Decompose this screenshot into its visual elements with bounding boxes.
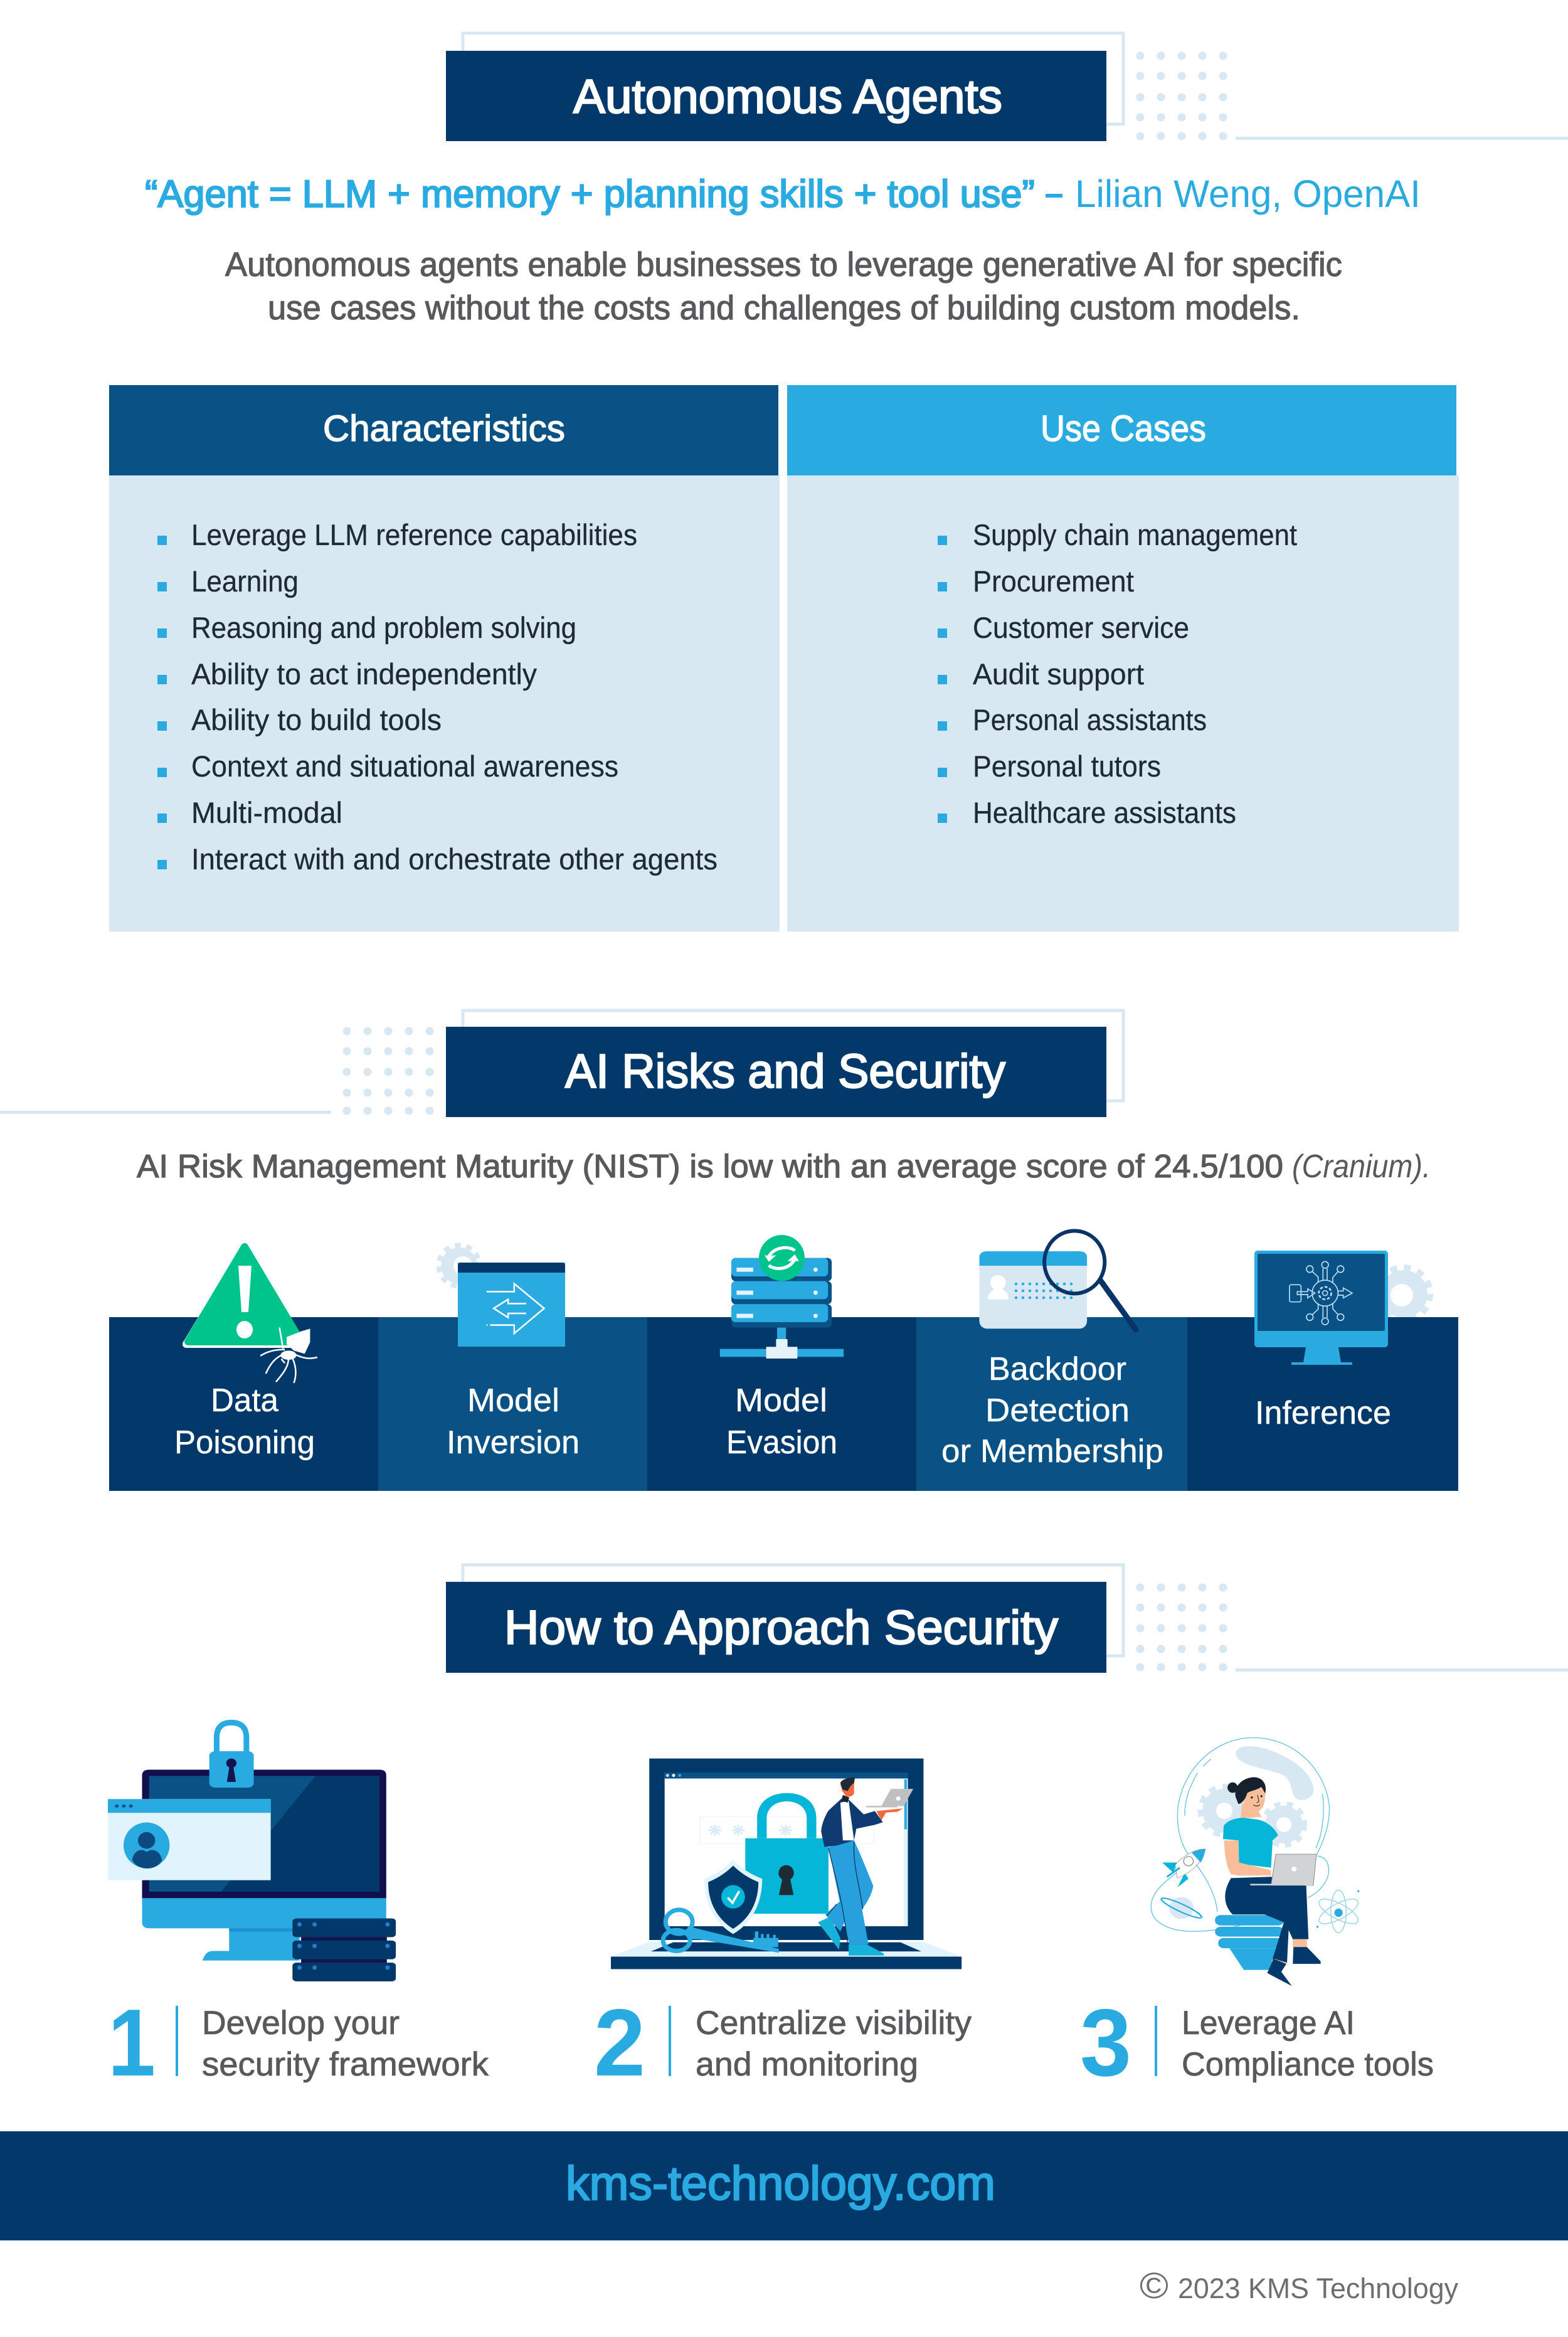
label: Evasion: [726, 1424, 837, 1461]
list: characteristics: Reasoning and problem solving: [191, 611, 576, 644]
label: [447, 1382, 580, 1461]
icon: arrows panel: [458, 1263, 565, 1347]
step 1 text: security framework: [202, 2046, 489, 2083]
risk: data poisoning: [174, 1247, 317, 1461]
step 1 text: [202, 2005, 489, 2083]
label: Detection: [985, 1392, 1130, 1429]
decorative gear: model inversion: [439, 1246, 479, 1286]
step 1: [108, 1722, 489, 2096]
risk: backdoor detection: [941, 1231, 1163, 1470]
list: characteristics: Ability to act independently: [191, 657, 537, 691]
title: How to Approach Security: [504, 1601, 1058, 1655]
label: Data: [211, 1382, 278, 1419]
heading: characteristics: Characteristics: [323, 408, 565, 449]
list: use cases: Healthcare assistants: [973, 796, 1236, 829]
list: characteristics: [157, 518, 718, 876]
risk band: [109, 1317, 1458, 1491]
title: Autonomous Agents: [573, 70, 1002, 124]
list: characteristics: Context and situational awareness: [191, 750, 618, 783]
label: [941, 1351, 1163, 1470]
icon: server with sync badge: [720, 1235, 844, 1359]
list: characteristics: Multi-modal: [191, 796, 342, 829]
list: characteristics: Leverage LLM reference capabilities: [191, 518, 637, 551]
label: [726, 1382, 837, 1461]
section header: AI Risks and Security: [0, 1010, 1123, 1117]
list: use cases: [938, 518, 1297, 829]
copyright: 2023 KMS Technology: [1178, 2272, 1458, 2304]
label: Inference: [1255, 1395, 1391, 1431]
quote line: Lilian Weng, OpenAI: [1075, 172, 1421, 215]
step 2: [594, 1759, 972, 2096]
illustration: laptop, padlock, shield, key, man: [611, 1759, 961, 1969]
list: use cases: Audit support: [973, 657, 1144, 691]
label: Inversion: [447, 1424, 580, 1461]
icon: warning triangle with spider: [186, 1247, 317, 1383]
panel: use cases: [787, 385, 1459, 931]
step 3 text: Compliance tools: [1182, 2046, 1434, 2083]
number 3: 3: [1080, 1990, 1131, 2096]
website link: kms-technology.com: [566, 2157, 995, 2210]
risk: model evasion: [720, 1235, 844, 1461]
intro paragraph: use cases without the costs and challenges of building custom models.: [268, 289, 1300, 327]
step 1 text: Develop your: [202, 2005, 400, 2042]
step 3: [1080, 1737, 1434, 2096]
decorative gear: inference: [1377, 1268, 1430, 1320]
risk: inference: [1254, 1251, 1391, 1431]
step 3 text: Leverage AI: [1182, 2005, 1355, 2042]
maturity statement: AI Risk Management Maturity (NIST) is low with an average score of 24.5/100: [137, 1148, 1283, 1185]
intro paragraph: Autonomous agents enable businesses to leverage generative AI for specific: [225, 246, 1342, 284]
copyright: [1140, 2265, 1458, 2306]
number 2: 2: [594, 1990, 645, 2096]
icon: magnifier over id card: [979, 1231, 1136, 1330]
illustration: woman on light bulb: [1151, 1737, 1362, 1986]
copyright: ©: [1140, 2265, 1168, 2306]
list: use cases: Customer service: [973, 611, 1189, 644]
footer band: [0, 2131, 1568, 2240]
risk: model inversion: [447, 1263, 580, 1461]
step 3 text: [1182, 2005, 1434, 2083]
icon: monitor with circuit: [1254, 1251, 1388, 1365]
step 2 text: Centralize visibility: [696, 2005, 972, 2042]
maturity statement: (Cranium).: [1292, 1148, 1431, 1185]
intro paragraph: [225, 246, 1342, 327]
quote line: “Agent = LLM + memory + planning skills + tool use”: [145, 172, 1035, 215]
label: Model: [735, 1382, 827, 1419]
label: Model: [467, 1382, 559, 1419]
list: characteristics: Learning: [191, 564, 299, 598]
section header: How to Approach Security: [446, 1565, 1568, 1673]
title: AI Risks and Security: [565, 1045, 1005, 1098]
step 2 text: and monitoring: [696, 2046, 918, 2083]
list: use cases: Supply chain management: [973, 518, 1297, 551]
label: Poisoning: [174, 1424, 315, 1461]
quote line: [145, 172, 1421, 215]
list: use cases: Procurement: [973, 564, 1134, 598]
step 2 text: [696, 2005, 972, 2083]
label: or Membership: [941, 1433, 1163, 1470]
illustration: monitor with lock and servers: [108, 1722, 396, 1981]
list: use cases: Personal tutors: [973, 750, 1161, 783]
section header: Autonomous Agents: [446, 33, 1568, 141]
list: use cases: Personal assistants: [973, 703, 1207, 736]
panel: characteristics: [109, 385, 780, 931]
number 1: 1: [108, 1990, 156, 2096]
list: characteristics: Interact with and orchestrate other agents: [191, 842, 718, 876]
heading: use cases: Use Cases: [1041, 408, 1206, 449]
list: characteristics: Ability to build tools: [191, 703, 442, 736]
label: [174, 1382, 315, 1461]
label: Backdoor: [988, 1351, 1126, 1387]
